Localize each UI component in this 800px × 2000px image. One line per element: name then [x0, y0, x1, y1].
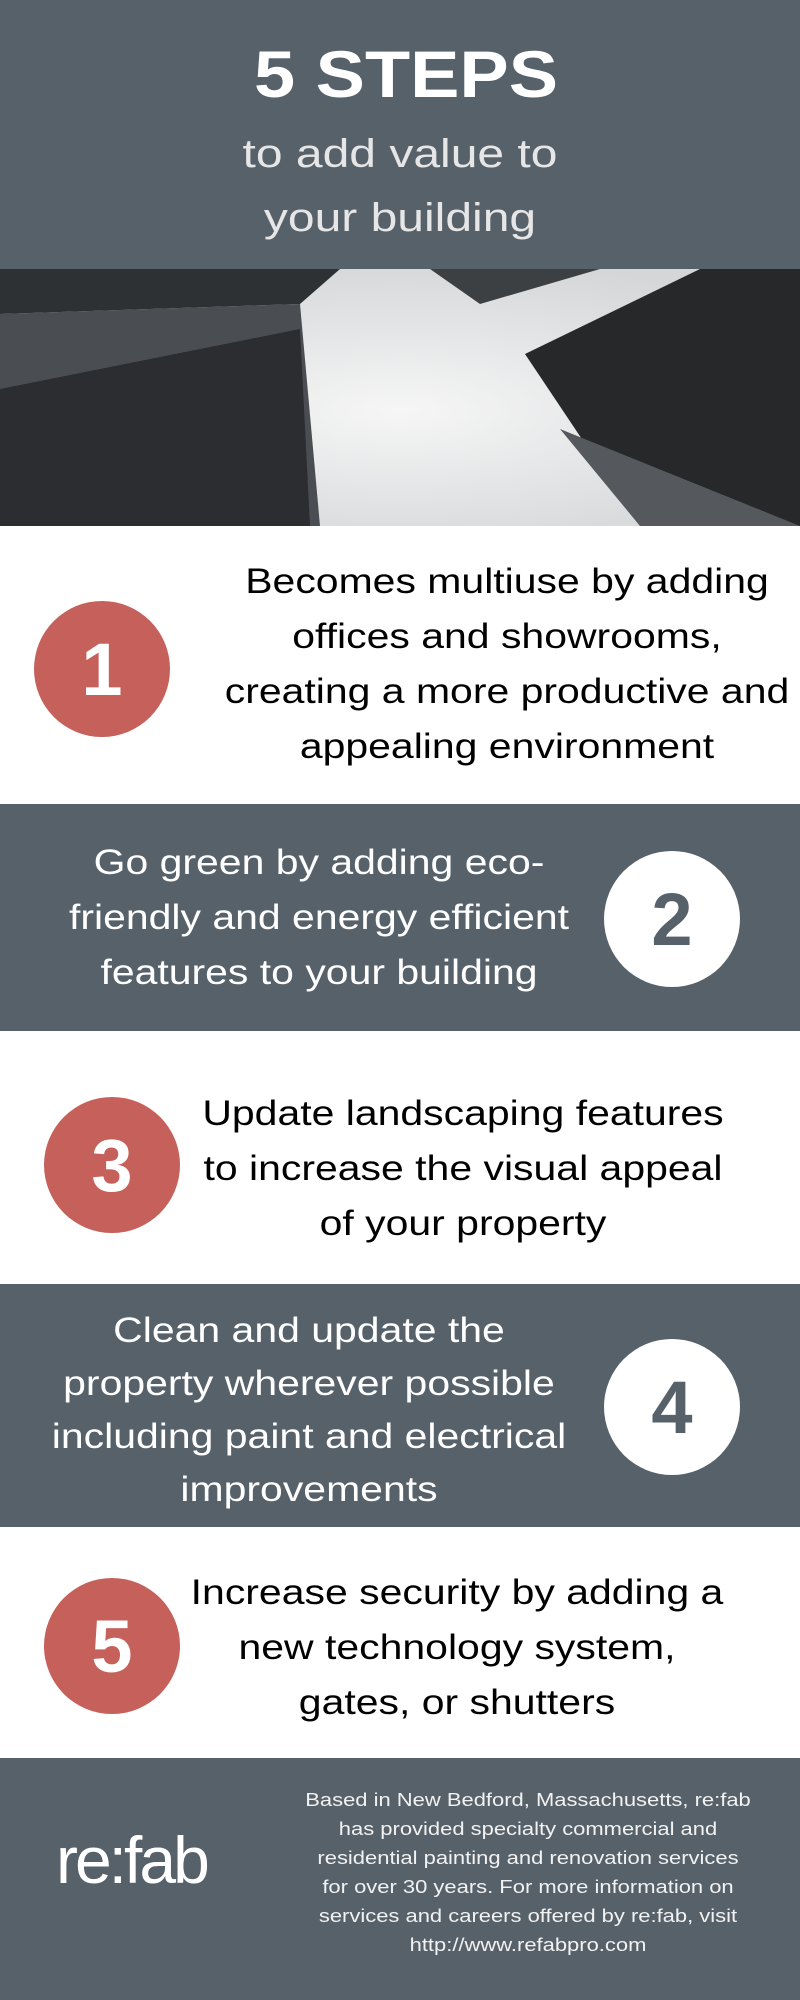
step 5: [44, 1573, 724, 1722]
circle 2: [604, 851, 740, 987]
text 3: to increase the visual appeal: [203, 1149, 723, 1188]
text 2: Go green by adding eco-: [94, 843, 544, 882]
text 4: improvements: [180, 1470, 438, 1509]
text 2: friendly and energy efficient: [69, 898, 569, 937]
circle 5: 5: [91, 1604, 133, 1688]
text 2: features to your building: [100, 953, 538, 992]
text 1: offices and showrooms,: [292, 617, 722, 656]
text 3: of your property: [320, 1204, 606, 1243]
footer text: for over 30 years. For more information on: [322, 1877, 734, 1897]
text 1: appealing environment: [300, 727, 714, 766]
header: [0, 0, 800, 270]
footer text: has provided specialty commercial and: [339, 1819, 717, 1839]
step 4: [0, 1284, 800, 1527]
text 4: Clean and update the: [113, 1311, 505, 1350]
footer text: services and careers offered by re:fab, visit: [319, 1906, 737, 1926]
circle 2: 2: [651, 878, 693, 960]
text 3: Update landscaping features: [202, 1094, 724, 1133]
subtitle: your building: [264, 196, 536, 240]
text 5: Increase security by adding a: [191, 1573, 723, 1612]
footer: [0, 1758, 800, 2000]
text 2: [69, 843, 569, 992]
text 5: new technology system,: [238, 1628, 676, 1667]
circle 3: 3: [91, 1124, 133, 1206]
text 1: [225, 562, 789, 766]
step 1: [34, 562, 789, 766]
step 2: [0, 804, 800, 1031]
subtitle: [243, 132, 557, 240]
logo: re:fab: [56, 1823, 207, 1897]
text 4: including paint and electrical: [52, 1417, 566, 1456]
text 5: [191, 1573, 724, 1722]
circle 3: [44, 1097, 180, 1233]
text 4: property wherever possible: [63, 1364, 555, 1403]
text 5: gates, or shutters: [299, 1683, 615, 1722]
footer text: Based in New Bedford, Massachusetts, re:fab: [305, 1790, 751, 1810]
circle 4: 4: [651, 1366, 693, 1448]
photo: skyscrapers: [0, 269, 800, 526]
circle 5: [44, 1578, 180, 1714]
step 3: [44, 1094, 724, 1243]
text 1: Becomes multiuse by adding: [245, 562, 769, 601]
text 3: [202, 1094, 724, 1243]
circle 1: 1: [81, 628, 123, 710]
subtitle: to add value to: [243, 132, 557, 176]
title: 5 STEPS: [254, 37, 558, 111]
footer text: [305, 1790, 751, 1955]
circle 1: [34, 601, 170, 737]
footer text: residential painting and renovation services: [317, 1848, 739, 1868]
text 1: creating a more productive and: [225, 672, 789, 711]
text 4: [52, 1311, 566, 1509]
footer text: http://www.refabpro.com: [410, 1935, 646, 1955]
circle 4: [604, 1339, 740, 1475]
